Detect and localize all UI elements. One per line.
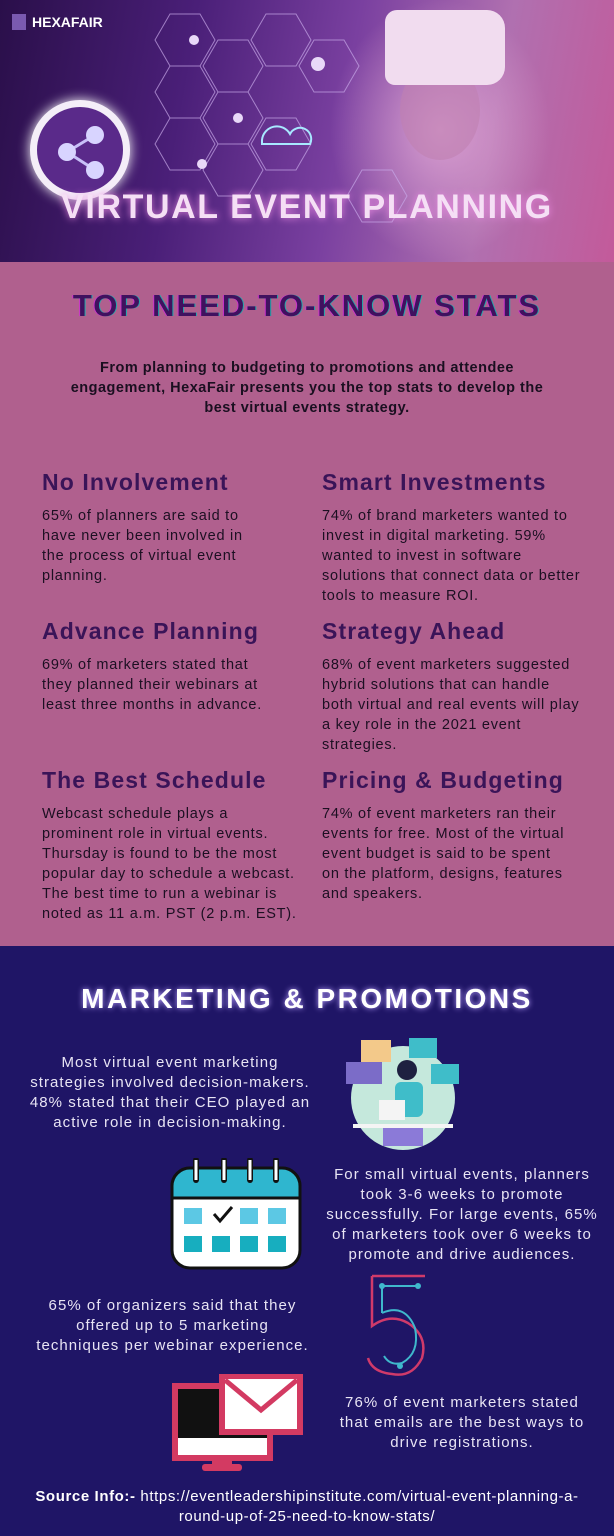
stat: smart investments bbox=[322, 469, 580, 604]
stat: no involvement bbox=[42, 469, 243, 584]
stat: strategy ahead: Strategy Ahead bbox=[322, 618, 505, 644]
text: promotion weeks: of marketers took over 6 weeks to bbox=[332, 1226, 592, 1243]
text: decision makers: active role in decision-making. bbox=[53, 1114, 287, 1131]
hero title: VIRTUAL EVENT PLANNING bbox=[61, 188, 553, 226]
icon: number 5 bbox=[366, 1274, 425, 1376]
intro text bbox=[71, 360, 543, 416]
text: promotion weeks bbox=[326, 1166, 598, 1263]
text: marketing techniques: 65% of organizers said that they bbox=[49, 1297, 296, 1314]
text: marketing techniques: techniques per webinar experience. bbox=[36, 1337, 309, 1354]
stat: strategy ahead: both virtual and real events will play bbox=[322, 697, 579, 713]
icon: share circle bbox=[30, 100, 130, 200]
intro text: engagement, HexaFair presents you the top stats to develop the bbox=[71, 380, 543, 396]
icon: woman at desk bbox=[346, 1038, 459, 1150]
text: promotion weeks: promote and drive audiences. bbox=[348, 1246, 576, 1263]
stat: strategy ahead: hybrid solutions that can handle bbox=[322, 677, 550, 693]
stat: best schedule: The best time to run a webinar is bbox=[42, 886, 277, 902]
intro text: best virtual events strategy. bbox=[204, 400, 410, 416]
text: emails: that emails are the best ways to bbox=[340, 1414, 584, 1431]
hero banner bbox=[0, 0, 614, 262]
text: decision makers bbox=[30, 1054, 310, 1131]
stat: best schedule: noted as 11 a.m. PST (2 p.m. EST). bbox=[42, 906, 297, 922]
text: marketing techniques bbox=[36, 1297, 309, 1354]
stat: advance planning: least three months in advance. bbox=[42, 697, 262, 713]
stat: smart investments: tools to measure ROI. bbox=[322, 588, 479, 604]
stat: no involvement: 65% of planners are said to bbox=[42, 508, 239, 524]
source info: Source Info:- https://eventleadershipinstitute.com/virtual-event-planning-a- bbox=[35, 1488, 579, 1505]
stat: no involvement: the process of virtual event bbox=[42, 548, 236, 564]
text: decision makers: strategies involved decision-makers. bbox=[30, 1074, 310, 1091]
stat: smart investments: solutions that connect data or better bbox=[322, 568, 580, 584]
text: emails: 76% of event marketers stated bbox=[345, 1394, 579, 1411]
stat: best schedule: Thursday is found to be the most bbox=[42, 846, 277, 862]
stat: advance planning: they planned their webinars at bbox=[42, 677, 258, 693]
stat: no involvement: planning. bbox=[42, 568, 108, 584]
panel: top stats bbox=[0, 262, 614, 946]
stat: strategy ahead bbox=[322, 618, 579, 753]
stat: smart investments: wanted to invest in software bbox=[322, 548, 522, 564]
stat: strategy ahead: strategies. bbox=[322, 737, 397, 753]
logo: HEXAFAIR bbox=[32, 14, 103, 30]
stat: smart investments: invest in digital marketing. 59% bbox=[322, 528, 546, 544]
stat: pricing: on the platform, designs, features bbox=[322, 866, 563, 882]
stat: strategy ahead: a key role in the 2021 event bbox=[322, 717, 521, 733]
heading: top stats: TOP NEED-TO-KNOW STATS bbox=[73, 288, 541, 323]
text: promotion weeks: took 3-6 weeks to promote bbox=[360, 1186, 564, 1203]
stat: no involvement: No Involvement bbox=[42, 469, 229, 495]
stat: pricing: and speakers. bbox=[322, 886, 423, 902]
text: decision makers: 48% stated that their CEO played an bbox=[30, 1094, 310, 1111]
stat: no involvement: have never been involved in bbox=[42, 528, 243, 544]
stat: pricing: event budget is said to be spent bbox=[322, 846, 551, 862]
source info: round-up-of-25-need-to-know-stats/ bbox=[179, 1508, 435, 1525]
stat: pricing bbox=[322, 767, 564, 902]
source info bbox=[35, 1488, 579, 1525]
stat: advance planning: 69% of marketers stated that bbox=[42, 657, 248, 673]
VR headset bbox=[385, 10, 505, 85]
icon: calendar bbox=[170, 1158, 302, 1270]
stat: advance planning bbox=[42, 618, 262, 713]
stat: advance planning: Advance Planning bbox=[42, 618, 259, 644]
stat: best schedule: prominent role in virtual events. bbox=[42, 826, 268, 842]
text: emails bbox=[340, 1394, 584, 1451]
text: promotion weeks: successfully. For large events, 65% bbox=[326, 1206, 598, 1223]
stat: best schedule: The Best Schedule bbox=[42, 767, 266, 793]
text: promotion weeks: For small virtual events, planners bbox=[334, 1166, 590, 1183]
icon: email computer bbox=[172, 1374, 303, 1471]
stat: pricing: 74% of event marketers ran their bbox=[322, 806, 556, 822]
heading: marketing & promotions: MARKETING & PROMOTIONS bbox=[81, 983, 533, 1014]
stat: best schedule: Webcast schedule plays a bbox=[42, 806, 228, 822]
text: emails: drive registrations. bbox=[390, 1434, 534, 1451]
stat: best schedule bbox=[42, 767, 297, 922]
stat: best schedule: popular day to schedule a webcast. bbox=[42, 866, 295, 882]
stat: strategy ahead: 68% of event marketers suggested bbox=[322, 657, 570, 673]
stat: pricing: Pricing & Budgeting bbox=[322, 767, 564, 793]
stat: pricing: events for free. Most of the virtual bbox=[322, 826, 564, 842]
stat: smart investments: Smart Investments bbox=[322, 469, 546, 495]
text: marketing techniques: offered up to 5 marketing bbox=[76, 1317, 269, 1334]
stat: smart investments: 74% of brand marketers wanted to bbox=[322, 508, 568, 524]
text: decision makers: Most virtual event marketing bbox=[62, 1054, 278, 1071]
intro text: From planning to budgeting to promotions and attendee bbox=[100, 360, 514, 376]
